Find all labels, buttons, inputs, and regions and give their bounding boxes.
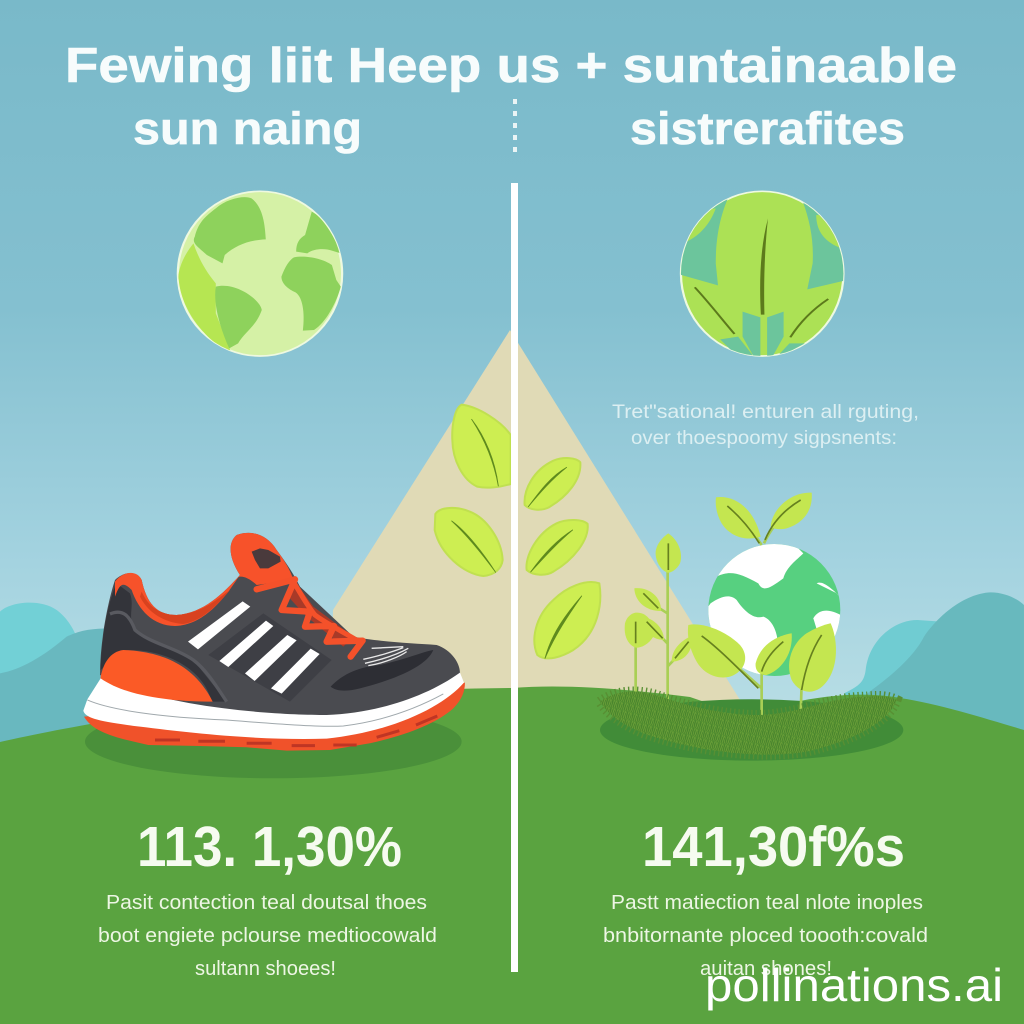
sapling leaves (625, 493, 836, 692)
caption line 2: over thoespoomy sigpsnents: (631, 428, 897, 449)
green hill (0, 686, 1024, 1024)
background hills: left (0, 603, 133, 757)
sneaker illustration (83, 533, 465, 778)
watermark: pollinations.ai (705, 959, 1003, 1011)
laces (257, 579, 363, 657)
heel dark panel (101, 583, 227, 702)
collar (115, 533, 293, 626)
earth (708, 544, 840, 676)
sapling leaf veins (636, 500, 822, 690)
right leaf globe (678, 191, 847, 357)
right globe disc (681, 191, 843, 356)
left statistic: 113. 1,30% (137, 815, 402, 879)
leaf veins (760, 218, 768, 315)
leaf 3 (525, 458, 580, 510)
right description line 2: bnbitornante ploced toooth:covald (603, 925, 928, 947)
right description line 1: Pastt matiection teal nlote inoples (611, 892, 923, 914)
lace spine (293, 582, 362, 643)
right caption (612, 402, 919, 449)
center vertical divider (511, 183, 518, 972)
upper (100, 533, 460, 715)
leaf 2 (435, 508, 503, 576)
sprouts and earth illustration (600, 493, 903, 761)
sneaker shadow (85, 705, 462, 778)
leaf 1 (452, 405, 511, 488)
leaf 5 (534, 582, 600, 658)
center dotted divider (513, 99, 517, 152)
left description line 1: Pasit contection teal doutsal thoes (106, 892, 427, 914)
teal gaps (678, 198, 847, 289)
white stripes (188, 601, 320, 694)
left globe shade (178, 243, 231, 353)
background hills: right (844, 592, 1024, 733)
outsole (84, 683, 465, 751)
left description line 3: sultann shoees! (195, 958, 336, 980)
corner leaves (688, 208, 840, 248)
ground shadow (600, 699, 903, 761)
right description (603, 892, 928, 980)
grass mound (600, 692, 897, 755)
europe (296, 212, 341, 253)
title (65, 39, 957, 154)
stripe panel (208, 613, 332, 702)
earth white landmasses (708, 544, 840, 674)
tongue logo (252, 548, 281, 568)
left description line 2: boot engiete pclourse medtiocowald (98, 925, 437, 947)
title line 1: Fewing liit Heep us + suntainaable (65, 39, 957, 93)
sapling stems (636, 502, 802, 718)
heel swoosh (110, 612, 227, 702)
right statistic: 141,30f%s (642, 815, 905, 879)
right description line 3: auitan shones! (700, 958, 832, 980)
tongue under laces (287, 583, 353, 647)
bottom teal (720, 312, 805, 357)
toe stitching (363, 647, 408, 666)
midsole (83, 668, 464, 739)
left description (98, 892, 437, 980)
subtitle left: sun naing (133, 103, 362, 154)
leaf 4 (526, 520, 588, 575)
left globe disc (178, 191, 342, 356)
left globe (178, 191, 342, 356)
south america (215, 286, 262, 348)
heel orange patch (101, 650, 213, 702)
midsole line (87, 694, 443, 726)
caption line 1: Tret"sational! enturen all rguting, (612, 402, 919, 423)
toe dark accent (331, 650, 433, 691)
north america (194, 197, 266, 263)
outsole grooves (155, 716, 437, 746)
africa (281, 257, 341, 331)
beige pyramid (330, 330, 745, 740)
subtitle right: sistrerafites (630, 103, 905, 154)
leaves on pyramid (435, 405, 600, 658)
collar inner (140, 590, 230, 624)
